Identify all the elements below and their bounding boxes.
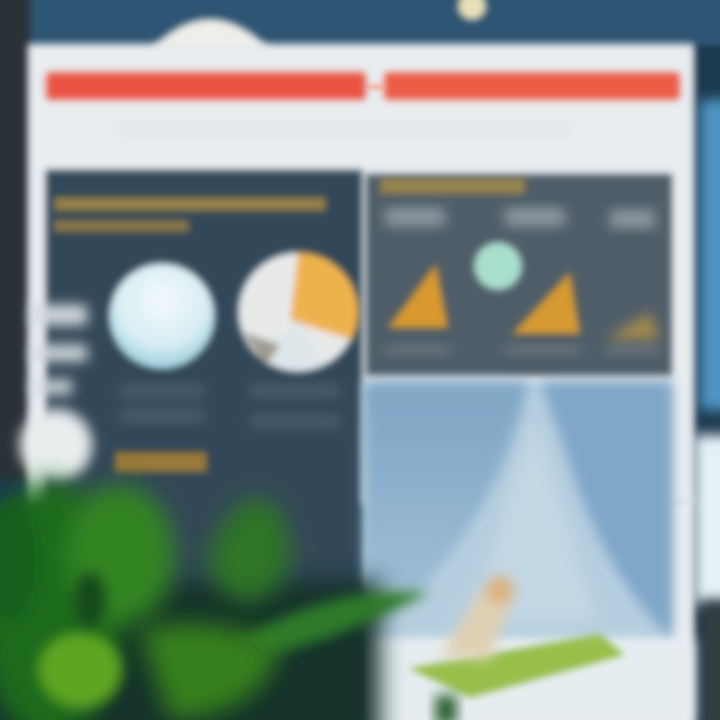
panel: left dark: [20, 170, 362, 610]
plant shadow: [0, 580, 380, 720]
title band: [46, 72, 680, 100]
orange label: [115, 452, 207, 472]
caption row: [385, 345, 660, 355]
icon: star top: [458, 0, 486, 20]
plant: [0, 480, 457, 720]
lower leaf: [140, 623, 280, 720]
center light: [470, 420, 595, 620]
left heading: [54, 197, 326, 232]
icon: orange mark 3: [605, 312, 660, 340]
icon: orange triangle 1: [388, 264, 448, 328]
middle leaf: [205, 498, 291, 602]
right curtain: [540, 382, 672, 640]
icon: lamp glow top: [150, 19, 270, 50]
icon: teal circle: [474, 242, 522, 290]
big left leaf cluster: [0, 480, 120, 720]
right heading: [380, 178, 525, 194]
column labels: [385, 208, 655, 228]
white blob: [20, 409, 92, 481]
left side labels: [32, 305, 87, 394]
icon: orange triangle 2: [512, 272, 580, 334]
panel: curtains: [364, 382, 672, 640]
green patch: [408, 634, 625, 698]
panel: right gray: [366, 174, 672, 376]
icon: sun circle: [238, 252, 359, 372]
long right leaf: [240, 591, 430, 655]
circle captions: [120, 385, 340, 427]
small stem: [435, 695, 457, 720]
bottom white area: [372, 640, 694, 720]
subtitle band: [120, 122, 570, 136]
figure: [440, 576, 515, 660]
poster sheet: [28, 44, 694, 504]
icon: water circle: [109, 263, 215, 369]
left curtain: [364, 382, 528, 590]
